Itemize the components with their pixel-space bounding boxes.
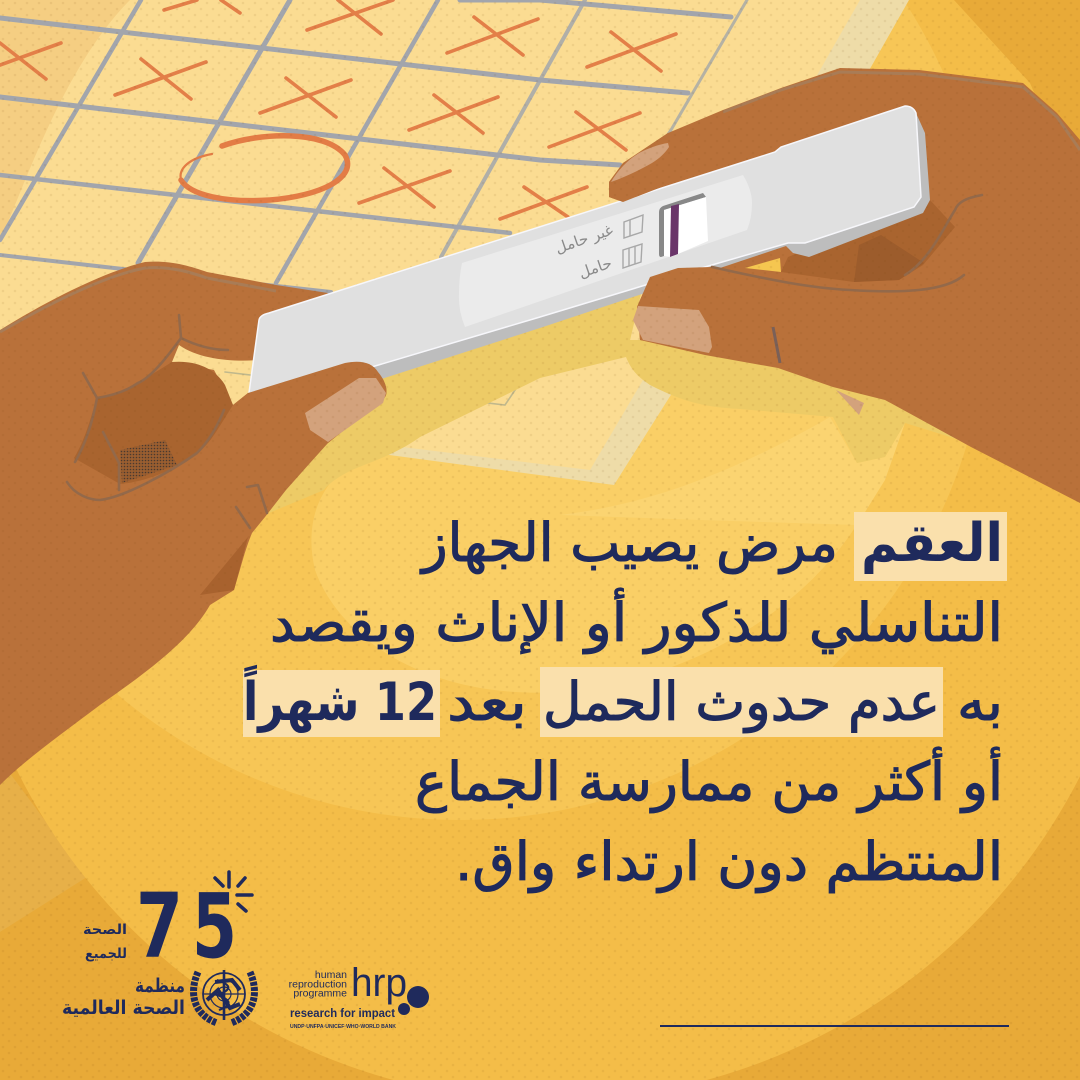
tagline: research for impact [290, 1006, 395, 1020]
label: pregnant: حامل [576, 254, 614, 282]
strip side [248, 113, 930, 410]
grid lines [0, 0, 747, 405]
left hand [0, 262, 386, 785]
footer rule [660, 1025, 1009, 1027]
numeral 7: 7 [136, 874, 183, 978]
WHO name: منظمة [135, 975, 185, 997]
line 3: عدم حدوث الحمل [543, 672, 940, 733]
knuckle creases [67, 315, 267, 528]
result window [659, 193, 708, 257]
right thumb over strip [633, 267, 964, 363]
calendar sheet [0, 0, 909, 485]
main text [243, 513, 1003, 893]
small nail behind [836, 390, 864, 415]
line 4: أو أكثر من ممارسة الجماع [415, 747, 1003, 813]
sheet outer band [0, 0, 909, 485]
line 2: التناسلي للذكور أو الإناث ويقصد [270, 588, 1003, 654]
right index finger over strip [609, 133, 700, 202]
positive line [670, 204, 679, 257]
line 3: 12 شهراً [243, 664, 437, 733]
index nail [611, 143, 669, 182]
programme name: programme [293, 988, 347, 1000]
line 3: به [957, 672, 1003, 733]
highlight boxes [243, 512, 1007, 737]
crossed-off days [0, 0, 676, 219]
logo dots [398, 986, 429, 1015]
hrp wordmark: hrp [351, 961, 407, 1005]
result panel [459, 175, 752, 327]
strip face [248, 106, 921, 400]
line 1: مرض يصيب الجهاز [419, 513, 838, 574]
wrist shadow [200, 537, 248, 595]
line 1: العقم [861, 513, 1003, 574]
HRP logo [289, 961, 429, 1030]
line 3: بعد [447, 672, 527, 733]
sheet paper [0, 0, 860, 470]
circled day [181, 136, 348, 201]
inner palm [74, 362, 233, 484]
pregnancy test strip [248, 106, 930, 410]
WHO name: الصحة العالمية [62, 997, 185, 1019]
WHO 75 logo [62, 872, 254, 1023]
top outline highlight [723, 72, 1080, 150]
outline highlight [0, 268, 276, 332]
programme name [289, 969, 347, 1000]
hand silhouette [0, 262, 386, 785]
lighter left margin [0, 0, 130, 240]
translucent shadow under left thumb and strip [269, 290, 642, 513]
line 5: المنتظم دون ارتداء واق. [455, 832, 1003, 893]
line 3 [243, 664, 1003, 733]
sun rays [215, 872, 252, 911]
thumb crease [712, 267, 964, 291]
right hand [609, 68, 1080, 503]
slogan [83, 922, 127, 962]
slogan: الصحة [83, 922, 127, 938]
numeral 5: 5 [192, 874, 237, 978]
WHO emblem [194, 970, 254, 1023]
thumb nail [633, 306, 712, 353]
slogan: للجميع [85, 946, 127, 962]
hand silhouette [609, 68, 1080, 503]
dot texture on fingers [308, 146, 711, 436]
programme name: reproduction [289, 978, 347, 990]
label: not pregnant: غير حامل [553, 221, 615, 257]
partners: UNDP·UNFPA·UNICEF·WHO·WORLD BANK [290, 1024, 396, 1030]
pregnant key [623, 244, 642, 268]
creases [905, 195, 982, 275]
stippled shadow [120, 440, 177, 483]
not pregnant key [624, 215, 643, 238]
gap between fingers [745, 258, 781, 272]
inner palm dark [854, 235, 924, 282]
WHO name [62, 975, 185, 1019]
left thumb nail [305, 378, 386, 442]
translucent shadow under right thumb [620, 340, 960, 463]
joint line [773, 327, 780, 363]
left thumb over strip [233, 362, 386, 470]
inner palm [781, 200, 955, 282]
programme name: human [315, 969, 347, 981]
